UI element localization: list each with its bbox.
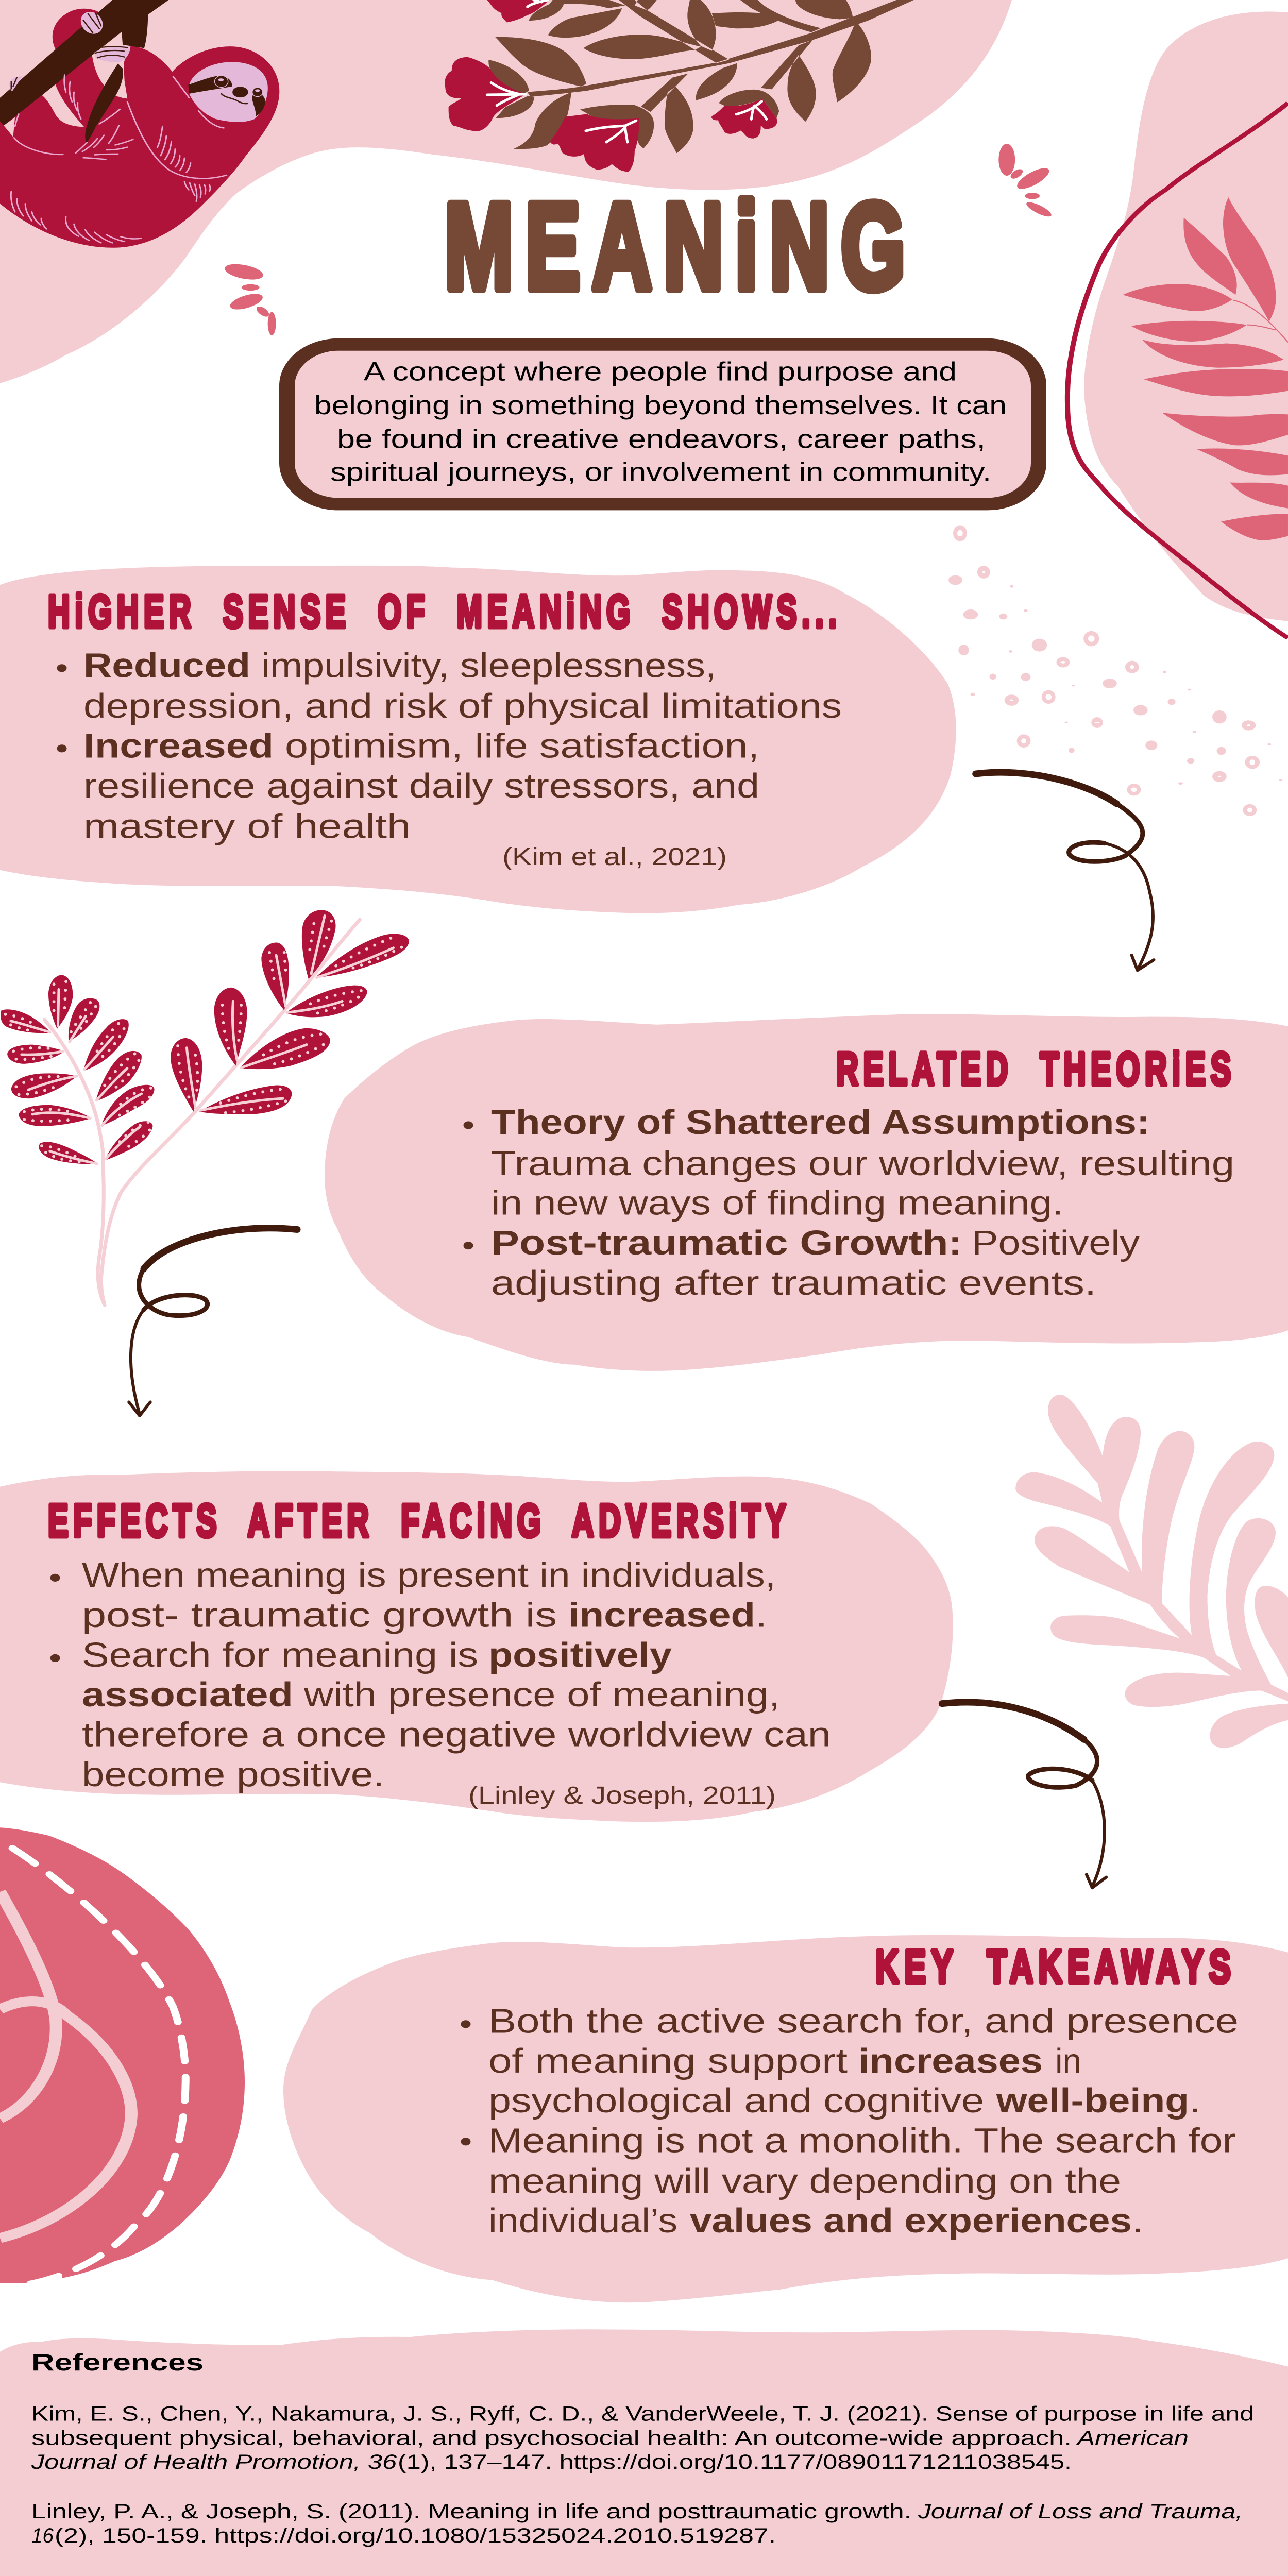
bullet list: resilience against daily stressors, and <box>83 767 759 805</box>
icon: sloth hanging from branch <box>0 0 279 248</box>
bullet list: . <box>1132 2201 1144 2240</box>
bullet list: Reduced <box>83 646 250 685</box>
bullet list: adjusting after traumatic events. <box>491 1264 1096 1302</box>
panel: higher sense of meaning <box>0 566 956 913</box>
panel blob <box>0 1471 953 1822</box>
bullet list: Increased <box>83 726 274 765</box>
bullet list: mastery of health <box>83 807 411 845</box>
bullet list <box>461 2002 1239 2240</box>
definition box: belonging in something beyond themselves. It can <box>314 391 1007 420</box>
icon: left sprinkle marks <box>218 261 276 335</box>
definition box: spiritual journeys, or involvement in community. <box>330 458 991 487</box>
icon: pink speckle dots <box>948 525 1282 816</box>
bullet list: individual’s <box>488 2201 677 2240</box>
icon: right sprinkle marks <box>998 144 1056 218</box>
definition box: be found in creative endeavors, career paths, <box>337 425 986 454</box>
bullet list <box>57 646 842 845</box>
bullet list: Positively <box>972 1224 1140 1262</box>
bullet list: optimism, life satisfaction, <box>285 726 759 765</box>
bullet list: When meaning is present in individuals, <box>82 1556 776 1595</box>
bullet list: increased <box>568 1596 755 1635</box>
citation: (Kim et al., 2021) <box>502 843 727 871</box>
icon: speckled crimson leaf sprig <box>1 910 409 1305</box>
bullet list <box>464 1103 1234 1302</box>
reference: Linley and Joseph: Linley, P. A., & Joseph, S. (2011). Meaning in life and posttraumatic growth. <box>31 2500 911 2523</box>
panel blob <box>0 566 956 913</box>
bullet list: impulsivity, sleeplessness, <box>261 646 716 685</box>
definition box <box>287 345 1039 504</box>
reference: Linley and Joseph <box>31 2500 1243 2547</box>
reference: Linley and Joseph: Journal of Loss and Trauma, <box>918 2500 1243 2523</box>
bullet list: positively <box>488 1636 672 1674</box>
panel: effects after facing adversity <box>0 1471 953 1822</box>
reference: Kim et al. <box>31 2402 1254 2473</box>
arrow: curl down to effects panel <box>129 1228 297 1416</box>
panel blob <box>0 2329 1288 2576</box>
reference: Kim et al.: (1), 137–147. https://doi.org/10.1177/08901171211038545. <box>398 2450 1072 2473</box>
bullet list: Post-traumatic Growth: <box>491 1224 962 1262</box>
bullet list <box>50 1556 831 1794</box>
bullet list: depression, and risk of physical limitations <box>83 687 842 725</box>
bullet list: therefore a once negative worldview can <box>82 1716 831 1754</box>
bullet list: with presence of meaning, <box>303 1675 780 1714</box>
bullet list: . <box>1189 2081 1201 2120</box>
top-left background blob <box>0 0 1012 383</box>
bullet list: in new ways of finding meaning. <box>491 1184 1063 1223</box>
bullet list: well-being <box>996 2081 1189 2120</box>
reference: Kim et al.: Journal of Health Promotion, 36 <box>31 2450 397 2473</box>
reference: Kim et al.: American <box>1076 2426 1189 2449</box>
bullet list: increases <box>858 2042 1043 2080</box>
arrow: curl down to key takeaways <box>942 1702 1106 1888</box>
panel: key takeaways <box>283 1935 1288 2302</box>
panel: references <box>0 2329 1288 2576</box>
icon: pale pink plant <box>1015 1395 1288 1748</box>
definition box: A concept where people find purpose and <box>364 357 957 386</box>
right background blob <box>1084 11 1288 621</box>
icon: flowering branch <box>445 0 914 172</box>
bullet list: values and experiences <box>690 2201 1132 2240</box>
bullet list: post- traumatic growth is <box>82 1596 557 1635</box>
bullet list: in <box>1055 2042 1081 2080</box>
bullet list: associated <box>82 1675 293 1714</box>
reference: Linley and Joseph: 16 <box>31 2524 54 2547</box>
icon: coral circle with stitched line <box>0 1827 245 2285</box>
bullet list: Search for meaning is <box>82 1636 478 1674</box>
panel: related theories <box>325 1014 1288 1371</box>
crimson outline curve <box>1067 103 1288 638</box>
bullet list: Both the active search for, and presence <box>488 2002 1239 2041</box>
bullet list: of meaning support <box>488 2042 848 2080</box>
bullet list: . <box>755 1596 767 1635</box>
panel blob <box>283 1935 1288 2302</box>
bullet list: psychological and cognitive <box>488 2081 984 2120</box>
reference: Kim et al.: Kim, E. S., Chen, Y., Nakamura, J. S., Ryff, C. D., & VanderWeele, T. J. (2021). Sense of purpose in life and <box>31 2402 1254 2425</box>
reference: Kim et al.: subsequent physical, behavioral, and psychosocial health: An outcome-wide approach. <box>31 2426 1072 2449</box>
bullet list: meaning will vary depending on the <box>488 2162 1121 2200</box>
icon: coral leaves <box>1123 197 1288 540</box>
reference: Linley and Joseph: (2), 150-159. https://doi.org/10.1080/15325024.2010.519287. <box>55 2524 776 2547</box>
bullet list: Theory of Shattered Assumptions: <box>491 1103 1150 1142</box>
citation: (Linley & Joseph, 2011) <box>468 1782 776 1809</box>
panel blob <box>325 1014 1288 1371</box>
references heading: References <box>31 2349 204 2376</box>
bullet list: Trauma changes our worldview, resulting <box>491 1144 1234 1183</box>
bullet list: Meaning is not a monolith. The search for <box>488 2122 1236 2160</box>
arrow: curl down to related theories <box>976 772 1154 970</box>
bullet list: become positive. <box>82 1755 384 1794</box>
